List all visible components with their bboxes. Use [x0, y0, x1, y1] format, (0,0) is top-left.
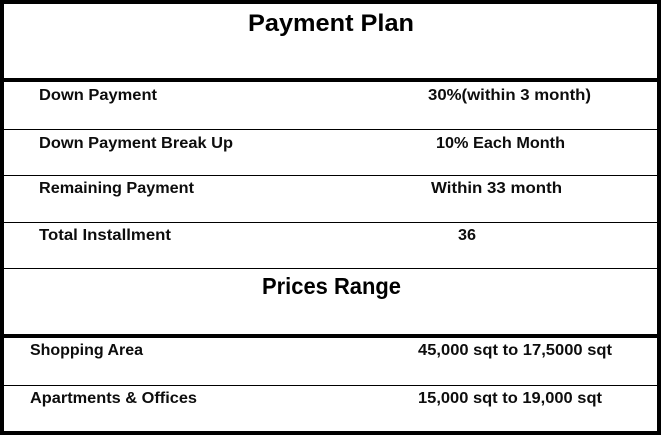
row: apartments and offices: [30, 390, 603, 407]
row: remaining payment: Within 33 month: [431, 180, 562, 197]
row: remaining payment: [39, 180, 562, 197]
row: down payment break up: 10% Each Month: [436, 135, 565, 152]
row: apartments and offices: Apartments & Offices: [30, 390, 197, 407]
row: total installment: 36: [458, 227, 476, 244]
row: down payment: 30%(within 3 month): [428, 87, 591, 104]
row: down payment: [39, 87, 591, 104]
row: shopping area: [30, 342, 613, 359]
row: apartments and offices: 15,000 sqt to 19,000 sqt: [418, 390, 603, 407]
row: total installment: Total Installment: [39, 227, 172, 244]
row: shopping area: Shopping Area: [30, 342, 143, 359]
heading: prices range: Prices Range: [262, 273, 401, 299]
row: down payment break up: [39, 135, 565, 152]
row: total installment: [39, 227, 476, 244]
row: shopping area: 45,000 sqt to 17,5000 sqt: [418, 342, 613, 359]
row: remaining payment: Remaining Payment: [39, 180, 195, 197]
row: down payment break up: Down Payment Break Up: [39, 135, 233, 152]
heading: payment plan: Payment Plan: [248, 10, 414, 37]
row: down payment: Down Payment: [39, 87, 158, 104]
row dividers: [0, 78, 661, 386]
